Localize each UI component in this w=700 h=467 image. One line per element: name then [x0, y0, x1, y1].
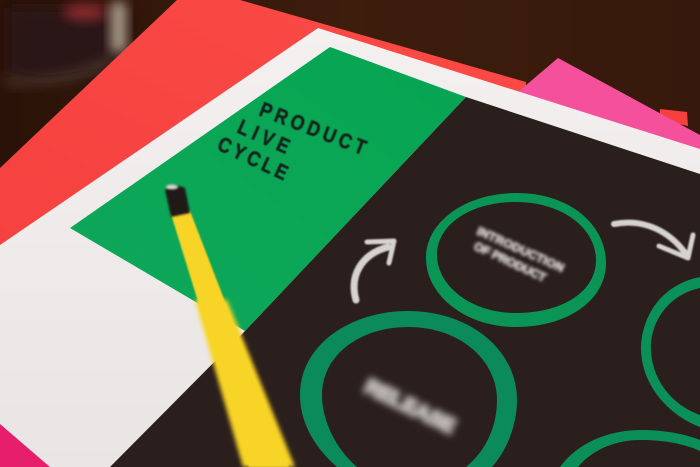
pencil body — [171, 211, 289, 467]
arrow: curved up right — [354, 241, 394, 300]
label: INTRODUCTION — [475, 224, 566, 275]
red folder — [0, 0, 688, 260]
pencil — [165, 184, 295, 467]
title line 3: CYCLE — [214, 132, 292, 185]
arrow: curved down right — [614, 223, 693, 258]
ring — [300, 311, 517, 467]
pencil cap — [165, 186, 190, 217]
title line 2: LIVE — [234, 115, 293, 159]
pencil tip highlight — [166, 184, 178, 190]
circle: introduction of product — [426, 193, 606, 327]
circle: right, partly cropped — [641, 277, 700, 427]
pink folder — [518, 58, 700, 152]
pencil lower body, soft edge — [195, 300, 295, 467]
black content panel — [110, 97, 700, 467]
magenta folder corner — [0, 423, 51, 467]
title: product live cycle — [214, 98, 369, 185]
title line 1: PRODUCT — [256, 98, 369, 160]
green title panel — [70, 47, 466, 331]
ring — [426, 193, 606, 327]
label: RELEASE — [361, 375, 459, 438]
circle: bottom, partly cropped — [560, 430, 700, 467]
blurred glass in the background — [4, 2, 128, 82]
label: OF PRODUCT — [472, 239, 549, 285]
circle: release — [300, 311, 517, 467]
